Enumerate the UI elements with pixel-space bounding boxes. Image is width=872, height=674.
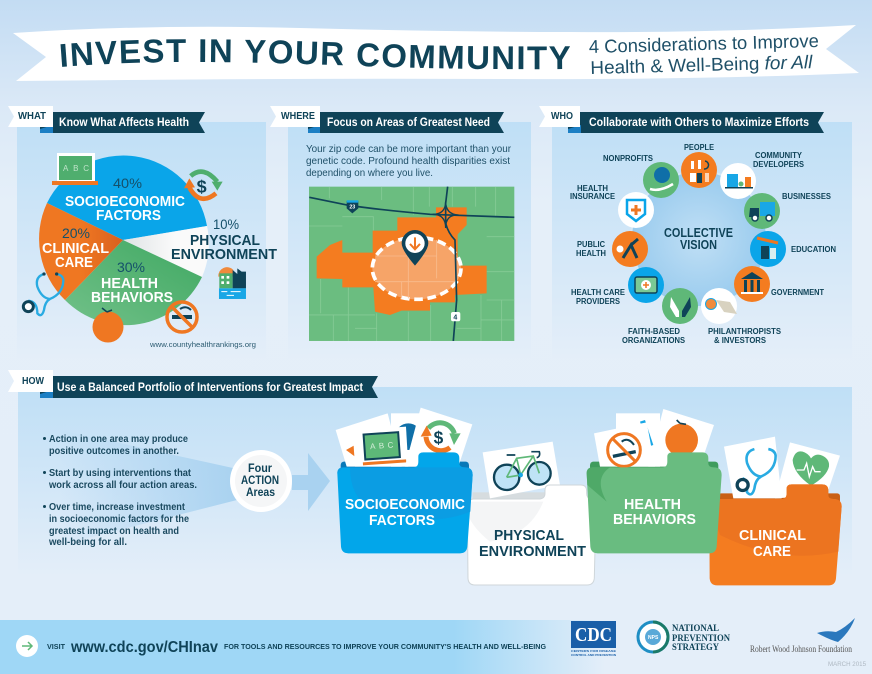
node: businesses: BUSINESSES [782, 192, 832, 201]
bullet list: in socioeconomic factors for the [49, 513, 189, 525]
paper: chalkboard: ABC [370, 441, 394, 451]
collective vision circle: COLLECTIVE [664, 225, 733, 240]
map [309, 187, 514, 341]
four action areas circle: ACTION [241, 475, 279, 487]
pie chart: CARE [55, 254, 93, 271]
node: philanthropists and investors: & INVESTORS [714, 336, 767, 345]
icon: green arrow [16, 635, 38, 657]
heading bar: where: Focus on Areas of Greatest Need [327, 117, 490, 129]
heading bar: how: Use a Balanced Portfolio of Interventions for Greatest Impact [57, 382, 363, 394]
pie chart [39, 156, 277, 325]
panel: what [8, 106, 277, 358]
heading bar: how: HOW [22, 376, 44, 387]
folder: physical environment: PHYSICAL [494, 527, 564, 544]
four action areas circle: Four [248, 463, 272, 475]
node: community developers: DEVELOPERS [753, 160, 805, 169]
node: health insurance: HEALTH [577, 184, 608, 193]
icon: chalkboard [52, 153, 98, 185]
folder: socioeconomic factors: FACTORS [369, 512, 435, 529]
paper: bicycle [483, 442, 560, 498]
pie chart: ENVIRONMENT [171, 246, 277, 263]
folder: socioeconomic factors: SOCIOECONOMIC [345, 496, 465, 513]
node: education: EDUCATION [791, 245, 836, 254]
icon: city and water [218, 267, 246, 299]
footer [0, 618, 866, 674]
logo: cdc: CENTERS FOR DISEASE [571, 649, 616, 653]
paper: no smoking [594, 422, 655, 467]
logo: national prevention strategy: STRATEGY [672, 642, 719, 652]
folder: clinical care: CLINICAL [739, 527, 806, 544]
node: community developers [720, 151, 805, 199]
node: philanthropists and investors: PHILANTHROPISTS [708, 327, 782, 336]
call to action: VISIT [47, 642, 65, 651]
pie chart: FACTORS [96, 207, 161, 224]
folder: health behaviors [587, 409, 722, 553]
description text [306, 143, 511, 179]
description text: genetic code. Profound health disparities exist [306, 155, 510, 167]
paper: stethoscope [724, 437, 782, 498]
folder: health behaviors: BEHAVIORS [613, 511, 696, 528]
collective vision circle: VISION [680, 237, 717, 252]
folder: clinical care: CARE [753, 543, 791, 560]
description text: Your zip code can be more important than your [306, 143, 511, 155]
node: faith-based organizations: FAITH-BASED [628, 327, 680, 336]
node: public health: PUBLIC [577, 240, 605, 249]
icon: chalkboard: ABC [63, 164, 89, 173]
panel: how [8, 370, 852, 585]
heading bar: how [8, 370, 378, 398]
paper: heart [775, 442, 840, 498]
heading bar: where [270, 106, 504, 133]
icon: no smoking [167, 302, 197, 332]
heading bar: what: Know What Affects Health [59, 117, 189, 129]
node: health care providers: PROVIDERS [576, 297, 621, 306]
pie chart: HEALTH [101, 275, 158, 292]
fan arrow shape [60, 430, 237, 545]
logo: national prevention strategy: PREVENTION [672, 633, 730, 643]
bullet list: work across all four action areas. [48, 479, 197, 491]
node: health insurance: INSURANCE [570, 192, 616, 201]
bullet list: Over time, increase investment [49, 501, 185, 513]
call to action [47, 639, 546, 656]
logo: robert wood johnson foundation [750, 618, 855, 655]
date: MARCH 2015 [828, 661, 866, 668]
folder: clinical care [709, 437, 842, 585]
heading bar: what [8, 106, 205, 133]
icon: dollar cycle [184, 172, 223, 199]
call to action: www.cdc.gov/CHInav [70, 639, 218, 656]
bullet list: well-being for all. [48, 536, 127, 548]
node: government [734, 266, 824, 302]
icon: apple [92, 308, 124, 342]
bullet list: Action in one area may produce [49, 433, 188, 445]
description text: depending on where you live. [306, 167, 433, 179]
node: nonprofits [603, 154, 679, 198]
logo: cdc [571, 621, 616, 657]
folder: socioeconomic factors [336, 408, 473, 553]
paper: chalkboard [353, 427, 408, 467]
panel: who [539, 106, 852, 358]
title text: INVEST IN YOUR COMMUNITY [60, 39, 570, 70]
four action areas circle [230, 450, 292, 512]
logo: cdc: CDC [575, 624, 612, 646]
subtitle: 4 Considerations to Improve [589, 30, 819, 57]
logo: national prevention strategy: NATIONAL [672, 623, 719, 633]
paper: dollar cycle: $ [434, 428, 444, 448]
paper: pencil [616, 413, 660, 467]
icon: stethoscope [23, 272, 63, 315]
folder: physical environment [467, 442, 596, 585]
node: community developers: COMMUNITY [755, 151, 803, 160]
heading bar: who: WHO [551, 111, 573, 122]
node: philanthropists and investors [701, 288, 782, 345]
source url: www.countyhealthrankings.org [149, 340, 256, 349]
map: 23 [349, 205, 355, 211]
logo: national prevention strategy: NPS [648, 635, 659, 641]
node: government: GOVERNMENT [771, 288, 824, 297]
map: 4 [453, 314, 457, 321]
node: nonprofits: NONPROFITS [603, 154, 654, 163]
heading bar: where: WHERE [281, 111, 315, 122]
node: faith-based organizations: ORGANIZATIONS [622, 336, 686, 345]
node: health care providers: HEALTH CARE [571, 288, 626, 297]
pie chart: 20% [62, 225, 90, 241]
node: people [681, 143, 717, 188]
pie chart: 30% [117, 259, 145, 275]
node: health care providers [571, 267, 664, 306]
bullet list: greatest impact on health and [49, 525, 179, 537]
bullet list [43, 433, 197, 548]
folder: physical environment: ENVIRONMENT [479, 543, 586, 560]
logo: national prevention strategy [638, 622, 730, 652]
panel: where [270, 106, 531, 358]
paper: city [336, 413, 402, 467]
node: health insurance [570, 184, 654, 228]
node: public health: HEALTH [576, 249, 606, 258]
paper: globe [391, 413, 422, 467]
pie chart: 10% [213, 216, 239, 232]
arrow to folders [292, 453, 330, 511]
bullet list: Start by using interventions that [49, 467, 191, 479]
logo: cdc: CONTROL AND PREVENTION [571, 653, 616, 657]
subtitle: Health & Well-Being for All [590, 51, 813, 78]
title banner [13, 25, 859, 81]
bullet list: positive outcomes in another. [49, 445, 179, 457]
heading bar: what: WHAT [18, 111, 46, 122]
pie chart: BEHAVIORS [91, 289, 173, 306]
icon: dollar cycle: $ [197, 176, 207, 196]
paper: apple [648, 409, 714, 467]
node: people: PEOPLE [684, 143, 715, 152]
heading bar: who: Collaborate with Others to Maximize Efforts [589, 117, 809, 129]
node: public health [576, 231, 648, 267]
folder: health behaviors: HEALTH [624, 496, 681, 513]
pie chart: CLINICAL [42, 240, 109, 257]
pie chart: PHYSICAL [190, 232, 260, 249]
node: faith-based organizations [622, 288, 698, 345]
collective vision circle [631, 171, 767, 307]
subtitle [589, 30, 820, 78]
call to action: FOR TOOLS AND RESOURCES TO IMPROVE YOUR COMMUNITY'S HEALTH AND WELL-BEING [224, 642, 546, 651]
node: businesses [744, 192, 832, 229]
pie chart: SOCIOECONOMIC [65, 193, 185, 210]
node: education [750, 231, 836, 267]
four action areas circle: Areas [246, 487, 275, 499]
pie chart: 40% [113, 175, 142, 191]
heading bar: who [539, 106, 824, 133]
paper: dollar cycle [405, 408, 472, 467]
